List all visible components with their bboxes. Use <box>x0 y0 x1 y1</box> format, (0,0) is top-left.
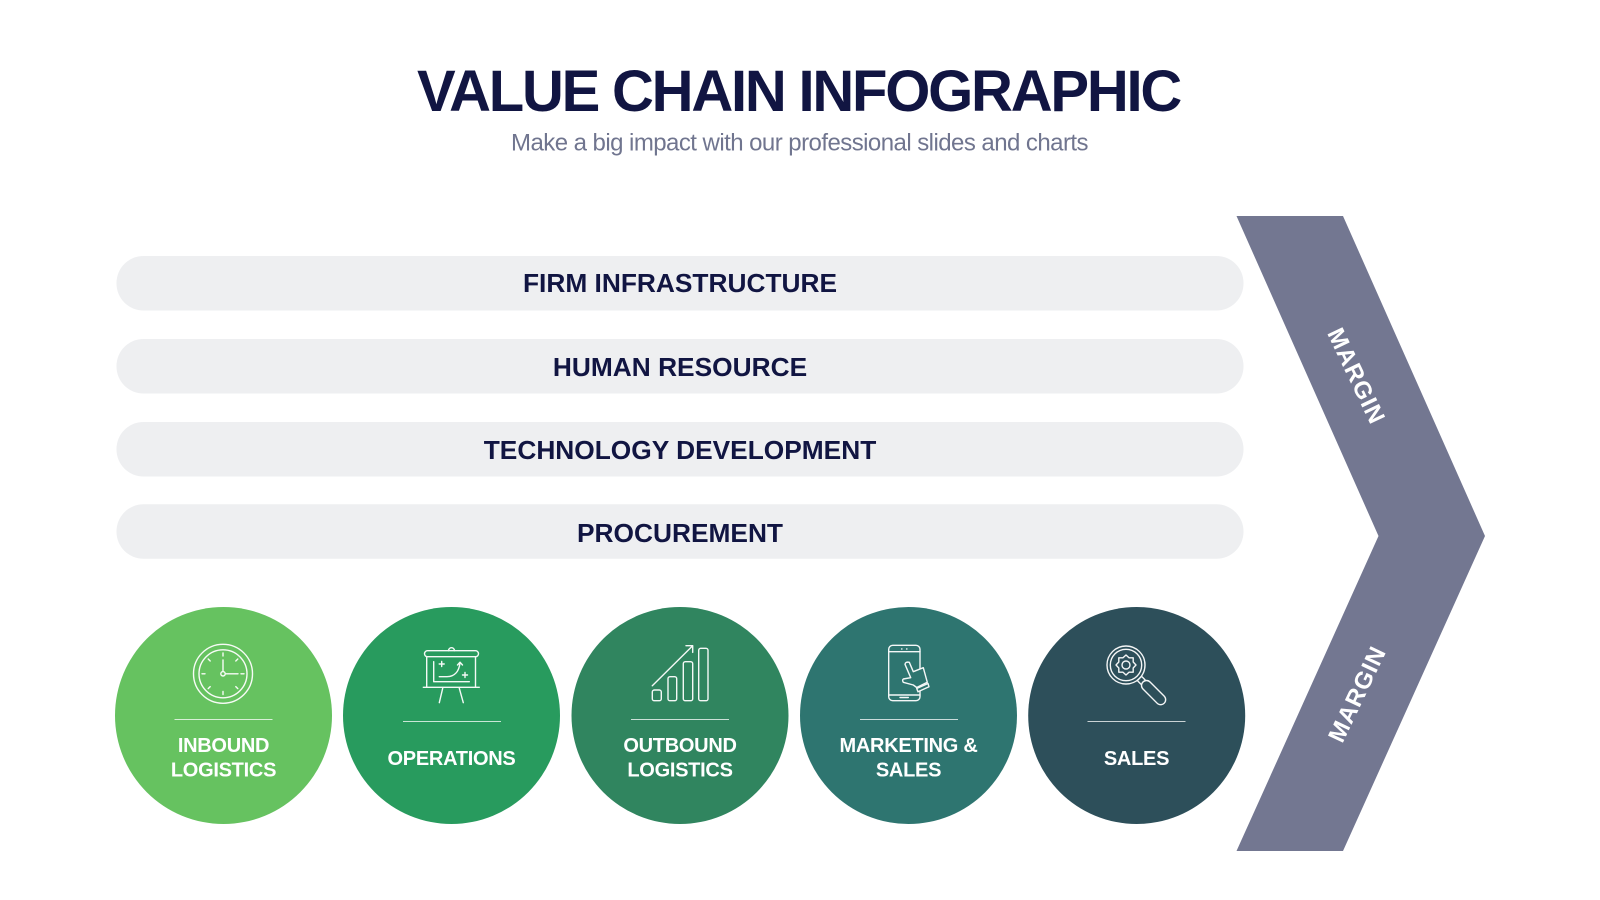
bar: firm infrastructure: FIRM INFRASTRUCTURE <box>523 268 837 298</box>
title: VALUE CHAIN INFOGRAPHIC <box>417 59 1181 124</box>
panel: primary activities <box>115 607 1245 824</box>
bar: procurement <box>116 504 1244 559</box>
icon: clock <box>194 644 252 703</box>
circle: marketing and sales: MARKETING & <box>839 735 978 757</box>
circle: outbound logistics: LOGISTICS <box>627 760 733 782</box>
bar: procurement: PROCUREMENT <box>577 518 783 548</box>
icon: presentation board <box>423 648 479 703</box>
circle: sales <box>1028 607 1245 824</box>
bar: technology development <box>116 422 1244 476</box>
circle: inbound logistics <box>115 607 332 824</box>
circle: inbound logistics: INBOUND <box>178 735 269 757</box>
chevron shape <box>1236 216 1485 851</box>
subtitle: Make a big impact with our professional slides and charts <box>511 130 1089 156</box>
circle: operations: OPERATIONS <box>388 748 515 770</box>
circle: outbound logistics: OUTBOUND <box>623 735 737 757</box>
panel: margin chevron <box>1236 216 1485 851</box>
label: lower margin: MARGIN <box>1323 642 1392 747</box>
bar: human resource <box>116 339 1244 394</box>
bar: technology development: TECHNOLOGY DEVELOPMENT <box>484 435 876 465</box>
circle: inbound logistics: LOGISTICS <box>171 760 276 782</box>
icon: rising bar chart <box>652 646 708 701</box>
panel: support activities <box>116 256 1244 559</box>
circle: marketing and sales <box>800 607 1017 824</box>
label: upper margin: MARGIN <box>1321 324 1390 429</box>
circle: outbound logistics <box>572 607 788 824</box>
icon: phone with hand <box>889 645 929 701</box>
bar: human resource: HUMAN RESOURCE <box>553 352 807 382</box>
circle: sales: SALES <box>1104 748 1169 770</box>
icon: magnifier with gear <box>1107 646 1168 707</box>
circle: marketing and sales: SALES <box>876 760 941 782</box>
bar: firm infrastructure <box>116 256 1244 310</box>
circle: operations <box>343 607 560 824</box>
